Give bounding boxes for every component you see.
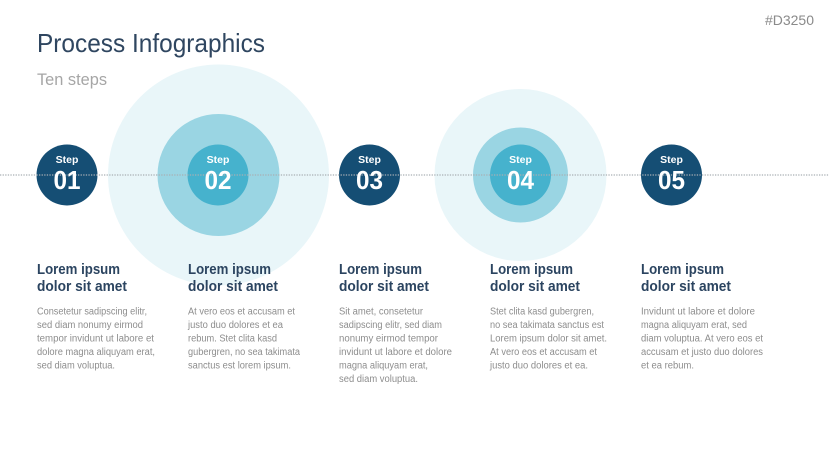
column 5 body: accusam et justo duo dolores: [641, 347, 763, 358]
column 1 heading: dolor sit amet: [37, 278, 127, 295]
column 2 body: justo duo dolores et ea: [187, 320, 283, 331]
document code: #D3250: [765, 13, 814, 28]
column 1 heading: [37, 261, 127, 295]
column 4 body: [489, 306, 607, 372]
step label 01: [54, 154, 80, 195]
column 4 text: [489, 261, 607, 372]
column 5 heading: dolor sit amet: [641, 278, 731, 295]
column 5 body: et ea rebum.: [641, 360, 694, 372]
column 5 body: diam voluptua. At vero eos et: [641, 334, 763, 344]
column 3 body: Sit amet, consetetur: [339, 306, 424, 318]
step label 03: 03: [356, 165, 383, 195]
step circle 01: [36, 144, 98, 206]
column 4 body: Stet clita kasd gubergren,: [490, 306, 594, 318]
column 3 body: [339, 306, 452, 385]
column 1 text: [37, 261, 155, 372]
column 2 heading: Lorem ipsum: [188, 261, 271, 278]
column 4 heading: [490, 261, 580, 295]
column 4 body: justo duo dolores et ea.: [489, 360, 588, 372]
column 3 body: nonumy eirmod tempor: [339, 334, 439, 344]
column 5 text: [641, 261, 763, 372]
step circle 02: [188, 144, 248, 206]
column 1 body: dolore magna aliquyam erat,: [37, 347, 155, 358]
column 3 text: [339, 261, 452, 385]
step label 05: 05: [658, 165, 685, 195]
step circle 03: [339, 144, 400, 206]
column 2 heading: [188, 261, 278, 295]
step label 03: Step: [358, 154, 381, 166]
column 4 body: Lorem ipsum dolor sit amet.: [490, 334, 607, 344]
column 2 body: sanctus est lorem ipsum.: [188, 360, 291, 372]
column 1 body: sed diam voluptua.: [37, 360, 115, 372]
column 4 body: At vero eos et accusam et: [490, 347, 597, 358]
column 2 body: At vero eos et accusam et: [188, 306, 295, 318]
column 4 heading: Lorem ipsum: [490, 261, 573, 278]
column 2 body: gubergren, no sea takimata: [188, 347, 300, 358]
step label 02: Step: [207, 154, 229, 166]
column 1 body: Consetetur sadipscing elitr,: [37, 306, 147, 318]
step label 01: Step: [56, 154, 78, 166]
column 5 body: [641, 306, 763, 372]
step label 02: [204, 154, 232, 195]
step label 04: Step: [509, 154, 532, 166]
column 2 body: rebum. Stet clita kasd: [188, 334, 277, 344]
step label 05: [658, 154, 685, 195]
step label 02: 02: [204, 165, 232, 195]
title: Process Infographics: [37, 28, 265, 58]
halo: step 04: [434, 89, 606, 261]
column 3 body: sadipscing elitr, sed diam: [339, 320, 442, 331]
step label 05: Step: [660, 154, 683, 166]
column 2 heading: dolor sit amet: [188, 278, 278, 295]
column 5 body: Invidunt ut labore et dolore: [641, 306, 755, 318]
step label 04: 04: [507, 165, 535, 195]
column 1 body: [37, 306, 155, 372]
column 4 body: no sea takimata sanctus est: [490, 320, 604, 331]
halo: step 02: [108, 64, 329, 286]
column 2 body: [187, 306, 300, 372]
column 1 body: tempor invidunt ut labore et: [37, 334, 154, 344]
column 3 heading: [339, 261, 429, 295]
column 5 body: magna aliquyam erat, sed: [641, 320, 747, 331]
column 1 heading: Lorem ipsum: [37, 261, 120, 278]
column 3 body: magna aliquyam erat,: [339, 360, 428, 372]
column 3 body: sed diam voluptua.: [339, 374, 418, 385]
step label 01: 01: [54, 165, 80, 195]
column 5 heading: [641, 261, 731, 295]
column 3 heading: Lorem ipsum: [339, 261, 422, 278]
column 1 body: sed diam nonumy eirmod: [37, 320, 143, 331]
step circle 05: [641, 144, 702, 206]
column 3 heading: dolor sit amet: [339, 278, 429, 295]
dotted timeline: [0, 174, 829, 176]
column 4 heading: dolor sit amet: [490, 278, 580, 295]
subtitle: Ten steps: [37, 70, 107, 89]
column 3 body: invidunt ut labore et dolore: [339, 347, 452, 358]
step circle 04: [490, 144, 551, 206]
column 5 heading: Lorem ipsum: [641, 261, 724, 278]
column 2 text: [187, 261, 300, 372]
step label 03: [356, 154, 383, 195]
